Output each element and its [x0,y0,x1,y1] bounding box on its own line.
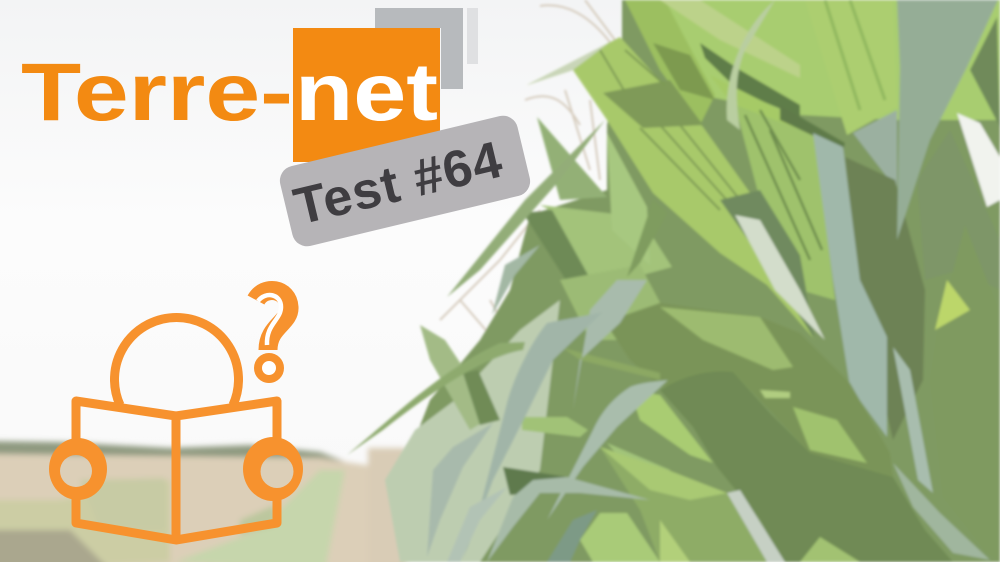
gray leaf: main [463,312,603,560]
corn plants [347,0,1000,562]
gray leaf: second [573,280,647,410]
logo: orange square [293,28,440,162]
thin leaves [447,120,605,297]
sky gap [957,113,1000,207]
icon: right hand [243,437,303,501]
gray leaf end [893,463,990,560]
lit left of big leaf [630,390,713,463]
lit band [522,417,588,437]
gray vertical leaf [853,110,897,190]
logo: gray squares [375,8,478,89]
icon: head [114,317,238,405]
badge: Test #64 [277,113,533,249]
shaded edge of lit leaf [720,190,815,340]
pale tassels [440,0,615,370]
gray leaf: right [547,380,668,520]
logo [21,8,478,162]
logo: net wordmark: net [295,47,438,138]
green stalk leaf [347,342,525,455]
icon: left hand [49,438,107,500]
right back leaves [917,130,1000,290]
top right gray leaf [897,0,998,240]
background: blurred field [0,441,406,562]
mid leaf [605,303,893,477]
logo: Terre- wordmark: Terre- [21,47,293,138]
icon: reader with open book and question mark [49,290,303,540]
lower left lit leaf [600,447,767,562]
right lit stripes [735,105,835,300]
dark background lower middle [503,467,590,495]
large lit leaf [527,37,815,340]
top band leaves [625,0,1000,120]
top lit leaf [805,0,897,135]
bottom lit leaf [580,513,660,562]
gray leaf: lower [427,423,493,557]
icon: question mark [256,290,289,379]
curled pale leaf [727,0,775,130]
back foliage [395,0,1000,562]
badge: Test #64: Test #64 [288,131,508,237]
icon: open book [76,401,277,540]
far right leaf [930,225,1000,562]
big bottom dark leaf [660,371,953,562]
